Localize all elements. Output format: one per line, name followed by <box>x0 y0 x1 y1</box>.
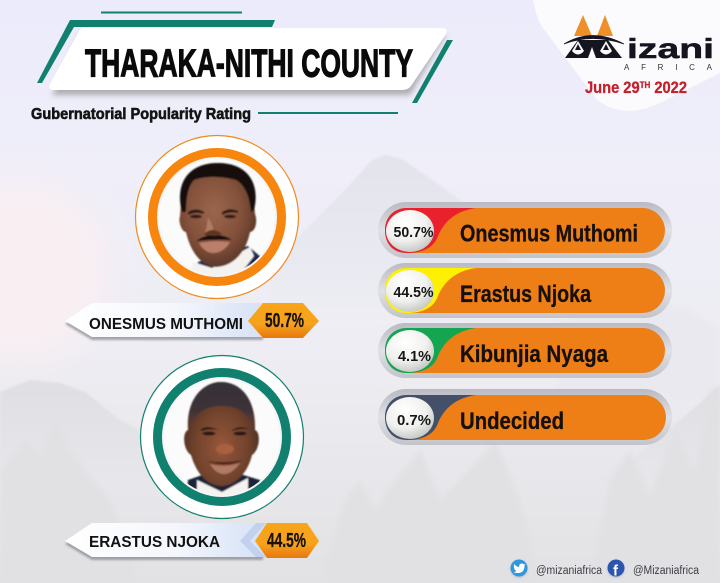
result bar: Erastus Njoka <box>378 263 672 318</box>
result bar: Onesmus Muthomi: 50.7% <box>394 225 434 241</box>
logo date: 2022 <box>650 79 687 97</box>
logo corner panel <box>533 0 720 111</box>
result bar: Erastus Njoka: Erastus Njoka <box>460 281 592 308</box>
icon: facebook <box>608 560 624 580</box>
name tag: Onesmus Muthomi: 50.7% <box>265 310 304 332</box>
result bar: Kibunjia Nyaga <box>378 323 672 378</box>
result bar: Undecided: Undecided <box>460 408 564 435</box>
result bar: Undecided <box>378 389 672 445</box>
portrait: Erastus Njoka <box>140 356 304 518</box>
percent badge <box>255 523 319 558</box>
logo: Mizani Africa <box>564 15 714 97</box>
name tag: Onesmus Muthomi <box>65 303 319 340</box>
subtitle: Gubernatorial Popularity Rating <box>31 106 251 123</box>
result bar: Onesmus Muthomi: Onesmus Muthomi <box>460 220 638 248</box>
name tag: Erastus Njoka: ERASTUS NJOKA <box>89 534 220 551</box>
result bar: Onesmus Muthomi <box>378 202 672 258</box>
result bar: Undecided: 0.7% <box>397 413 431 429</box>
percent badge <box>248 303 319 338</box>
result bar: Kibunjia Nyaga: Kibunjia Nyaga <box>460 341 609 368</box>
name tag: Erastus Njoka <box>65 523 319 560</box>
portrait: Onesmus Muthomi <box>136 136 298 298</box>
logo: Mizani Africa: izani <box>627 33 714 64</box>
title text: THARAKA-NITHI COUNTY <box>85 42 413 86</box>
social handles: @mizaniafrica <box>536 565 603 577</box>
logo date: TH <box>640 80 650 90</box>
title banner <box>37 12 453 103</box>
name tag: Onesmus Muthomi: ONESMUS MUTHOMI <box>89 316 243 333</box>
logo date: June 29 <box>585 79 646 97</box>
result bar: Erastus Njoka: 44.5% <box>394 285 434 301</box>
icon: facebook: f <box>613 562 619 580</box>
social handles: @Mizaniafrica <box>633 565 700 577</box>
result bar: Kibunjia Nyaga: 4.1% <box>398 349 431 365</box>
name tag: Erastus Njoka: 44.5% <box>267 530 306 552</box>
logo: Mizani Africa: AFRICA <box>624 63 713 72</box>
icon: twitter <box>510 560 528 578</box>
social handles <box>510 560 700 580</box>
